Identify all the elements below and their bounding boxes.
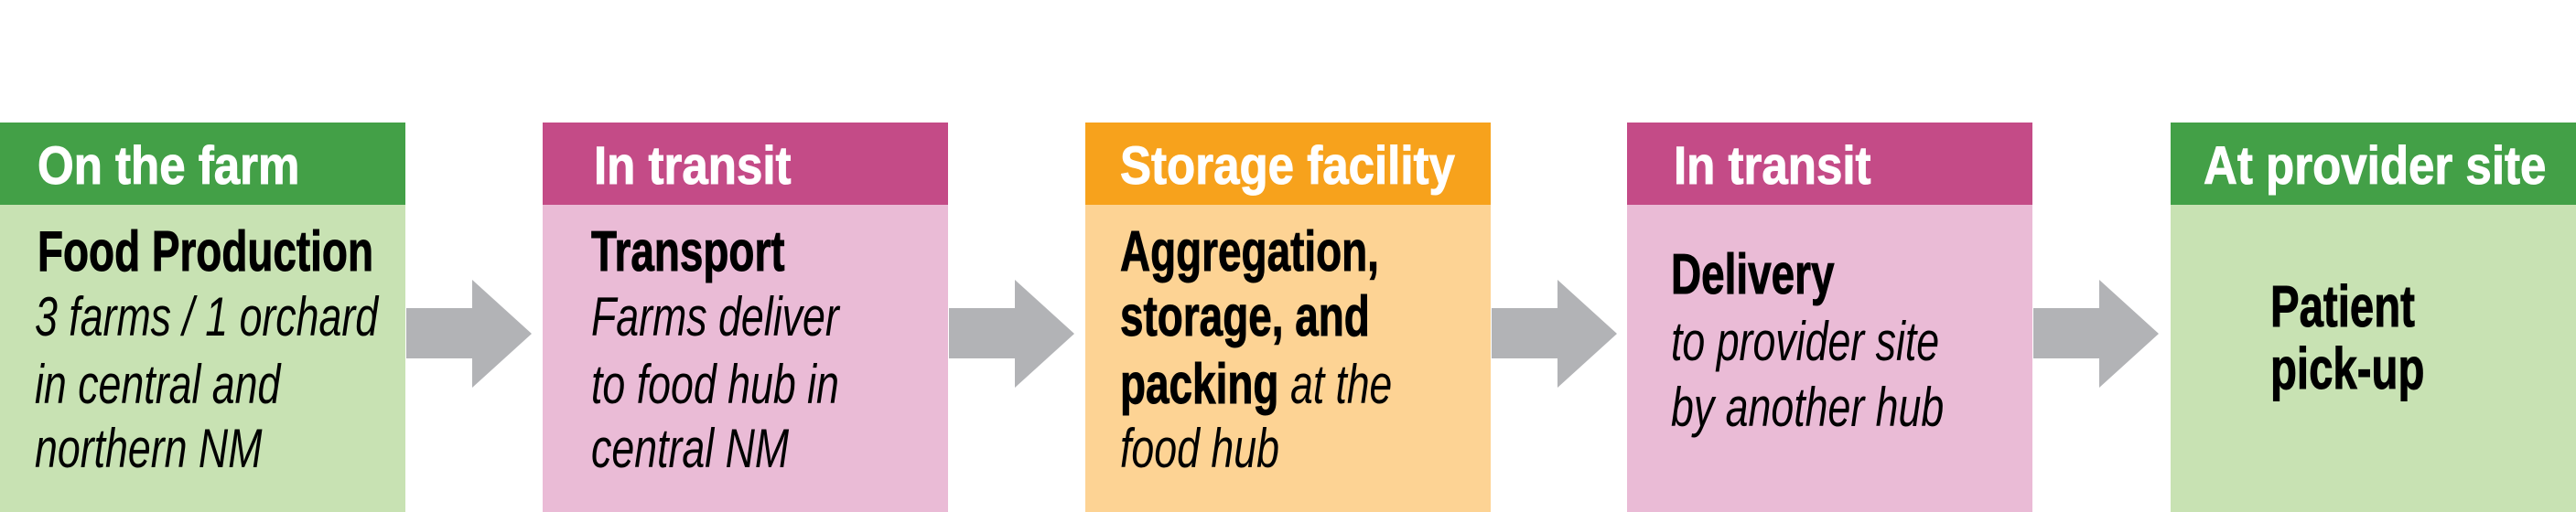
header: in transit (1627, 123, 2032, 205)
header: on the farm: On the farm (38, 136, 299, 196)
body: transport: Transport (591, 220, 785, 283)
body: transport: Farms deliver (591, 286, 839, 347)
panel: in transit (delivery) (1627, 123, 2032, 512)
body: aggregation: food hub (1120, 418, 1279, 479)
body: aggregation (1085, 205, 1491, 512)
arrow 2 (949, 280, 1074, 388)
arrow 4 (2033, 280, 2159, 388)
panel: storage facility (1085, 123, 1491, 512)
header: in transit (543, 123, 948, 205)
body: aggregation: packing at the (1120, 353, 1392, 416)
body: food production (0, 205, 405, 512)
body: delivery: to provider site (1671, 311, 1939, 372)
body: delivery (1627, 205, 2032, 512)
header: on the farm (0, 123, 405, 205)
body: food production: Food Production (38, 220, 373, 283)
body: delivery: by another hub (1671, 377, 1944, 438)
body: food production: in central and (35, 354, 280, 415)
body: delivery: Delivery (1671, 243, 1835, 306)
body: patient pick-up: pick-up (2270, 336, 2424, 401)
header: in transit: In transit (1674, 136, 1871, 196)
body: patient pick-up (2171, 205, 2576, 512)
body: transport: central NM (591, 418, 789, 479)
panel: in transit (transport) (543, 123, 948, 512)
arrow 3 (1492, 280, 1617, 388)
header: storage facility: Storage facility (1120, 136, 1455, 196)
body: aggregation: storage, and (1120, 285, 1370, 348)
body: food production: 3 farms / 1 orchard (35, 286, 378, 347)
panel: at provider site (2171, 123, 2576, 512)
header: at provider site (2171, 123, 2576, 205)
arrow 1 (406, 280, 532, 388)
body: patient pick-up: Patient (2270, 273, 2415, 339)
body: transport: to food hub in (591, 354, 839, 415)
body: transport (543, 205, 948, 512)
header: storage facility (1085, 123, 1491, 205)
panel: on the farm (0, 123, 405, 512)
body: aggregation: Aggregation, (1120, 220, 1379, 283)
header: at provider site: At provider site (2204, 136, 2546, 196)
header: in transit: In transit (594, 136, 792, 196)
body: food production: northern NM (35, 418, 262, 479)
